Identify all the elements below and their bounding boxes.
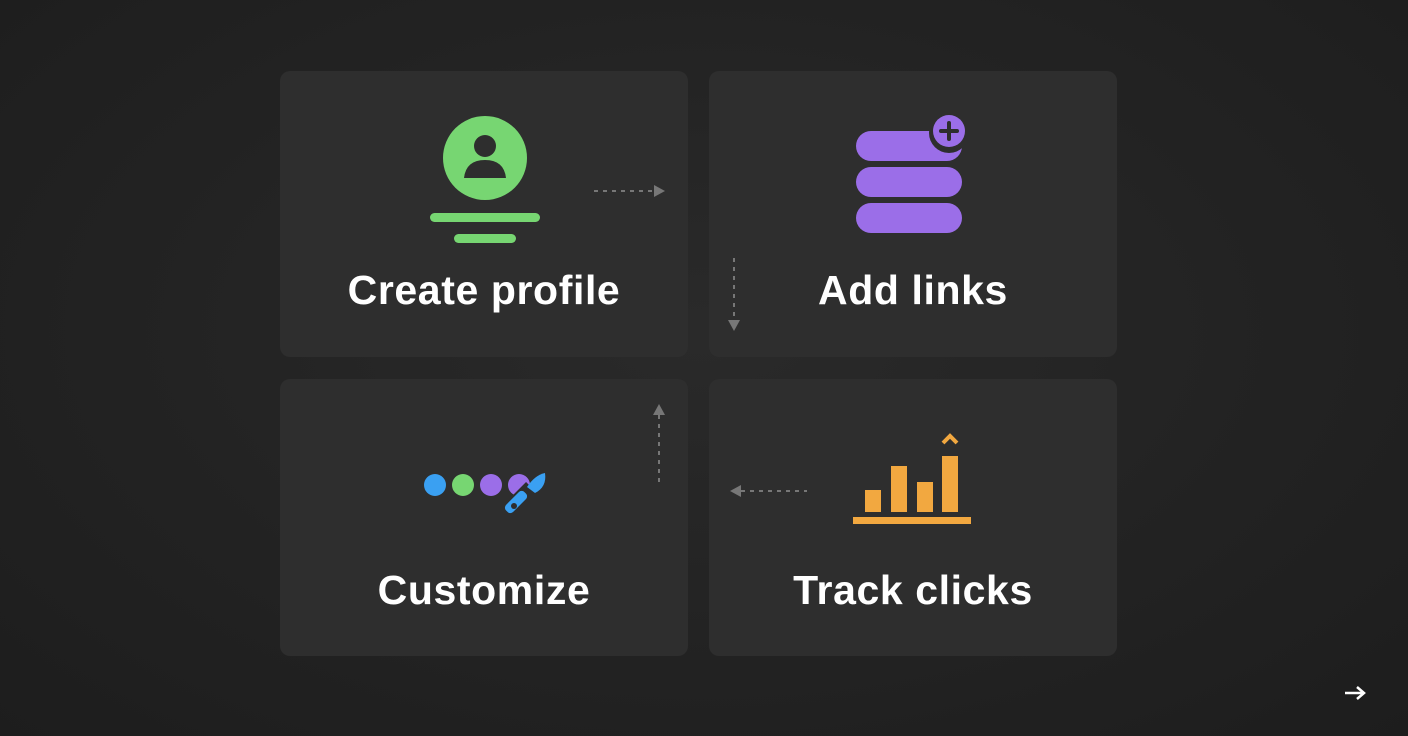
arrow: down [728, 258, 740, 331]
icon: profile [430, 116, 540, 243]
panel: create profile [280, 71, 688, 357]
panel: add links [709, 71, 1117, 357]
heading: Add links: Add links [818, 267, 1008, 313]
icon: next arrow [1345, 686, 1366, 700]
arrow: right [594, 185, 665, 197]
icon: bar chart [853, 433, 971, 524]
panel: track clicks [709, 379, 1117, 656]
arrow: up [653, 404, 665, 482]
icon: palette dots and brush [424, 473, 546, 514]
heading: Create profile: Create profile [348, 267, 620, 313]
arrow: left [730, 485, 807, 497]
panel: customize [280, 379, 688, 656]
heading: Customize: Customize [378, 567, 590, 613]
heading: Track clicks: Track clicks [793, 567, 1033, 613]
icon: link stack [856, 115, 965, 233]
